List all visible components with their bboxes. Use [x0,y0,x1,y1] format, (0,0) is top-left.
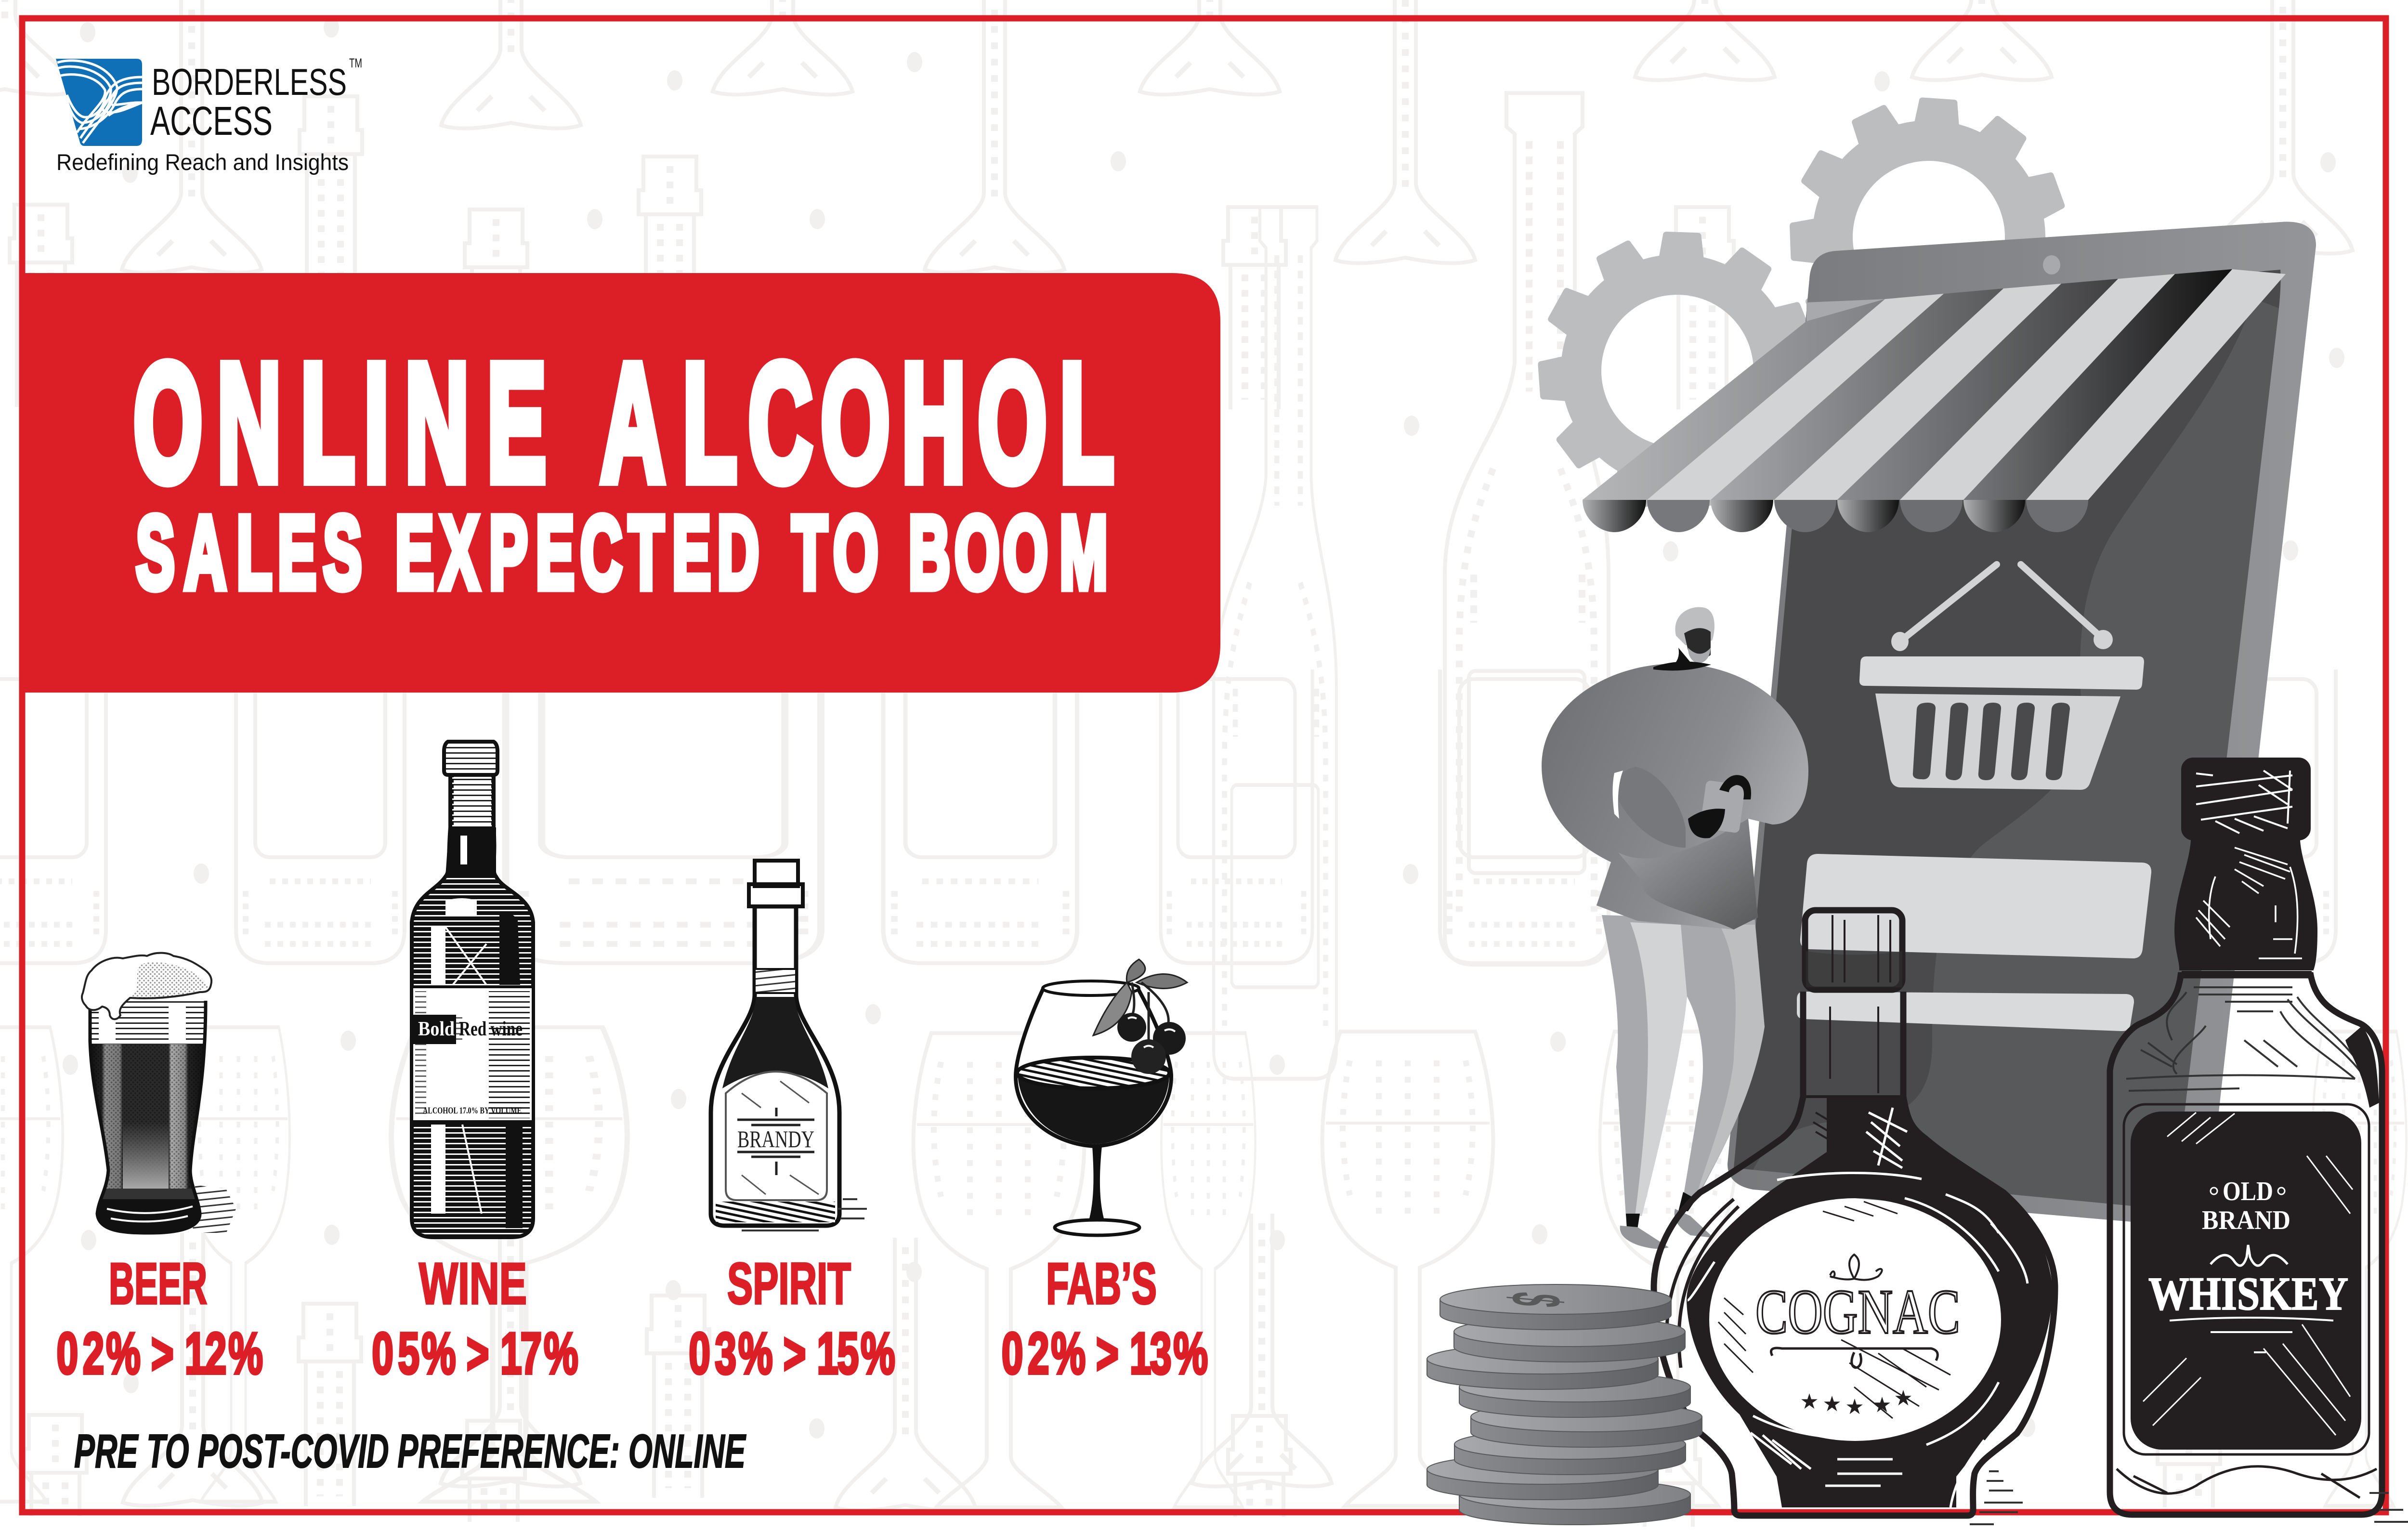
label: FAB's stats [1002,1251,1208,1386]
icon: dollar sign: $ [1496,1290,1576,1310]
phone and hands [1688,775,1751,838]
cognac black glass with label window [1687,1098,2053,1507]
logo icon: blue square with white waves [56,59,142,146]
label: wine stats: WINE [419,1251,527,1316]
logo wordmark: ACCESS [150,98,273,144]
head [1653,607,1714,670]
logo wordmark: BORDERLESS [152,61,347,103]
logo: Borderless Access [56,56,362,175]
wine label: Red wine [459,1018,523,1040]
cognac cap [1805,910,1902,1093]
legs [1602,915,1765,1216]
drink: beer glass [82,953,236,1235]
footnote: PRE TO POST-COVID PREFERENCE: ONLINE [74,1425,746,1478]
whiskey label [2131,1112,2361,1450]
wine label [412,987,533,1122]
label: FAB's stats: FAB’S [1046,1251,1157,1316]
label: beer stats: 02% > 12% [57,1320,263,1386]
tablet screen [1734,270,2281,1210]
person with phone [1542,607,1808,1249]
brandy label: BRANDY [737,1125,814,1152]
drink: wine bottle [412,742,533,1237]
wine label: Bold [418,1018,455,1040]
cognac label: ★★★★★ [1800,1387,1913,1419]
icon: gears [1532,89,2079,516]
logo wordmark: Redefining Reach and Insights [56,149,349,175]
title text: ONLINE ALCOHOL [133,329,1114,516]
sweater [1542,664,1808,929]
title text [133,329,1114,610]
cognac label [1718,1202,1960,1419]
cognac label: COGNAC [1755,1276,1960,1347]
title banner [19,273,1220,693]
label: spirit stats: 03% > 15% [689,1320,895,1386]
form field 1 [1800,854,2151,958]
bottle: cognac [1654,910,2055,1524]
arm and gap [1613,767,1686,848]
cognac outer outline [1654,992,2055,1516]
bottle: whiskey [2110,759,2408,1522]
awning [1583,269,2286,532]
label: beer stats: BEER [109,1251,207,1316]
coin stack [1427,1284,1702,1525]
logo wordmark [56,56,362,175]
label: beer stats [57,1251,263,1386]
drink: brandy bottle [711,861,867,1230]
title text: SALES EXPECTED TO BOOM [136,495,1108,610]
label: wine stats: 05% > 17% [372,1320,578,1386]
drink: cocktail glass with cherries [1016,959,1187,1235]
label: FAB's stats: 02% > 13% [1002,1320,1208,1386]
form field 2 [1797,992,2134,1031]
label: wine stats [372,1251,578,1386]
icon: shopping basket [1859,564,2144,790]
brandy label [737,1108,814,1175]
whiskey cap [2183,759,2309,839]
whiskey label: WHISKEY [2148,1268,2348,1320]
whiskey neck [2177,841,2315,968]
shoes [1620,1192,1714,1249]
whiskey shoulders and outline [2110,975,2382,1515]
whiskey label: OLD [2223,1177,2273,1206]
whiskey label: BRAND [2202,1205,2290,1235]
tablet storefront [1583,222,2316,1228]
label: spirit stats: SPIRIT [727,1251,851,1316]
wine label: ALCOHOL 17.0% BY VOLUME [423,1106,522,1116]
tablet camera [2043,255,2060,275]
tablet body [1727,222,2316,1228]
banner: red panel [19,273,1220,693]
logo wordmark: TM [349,56,362,70]
label: spirit stats [689,1251,895,1386]
